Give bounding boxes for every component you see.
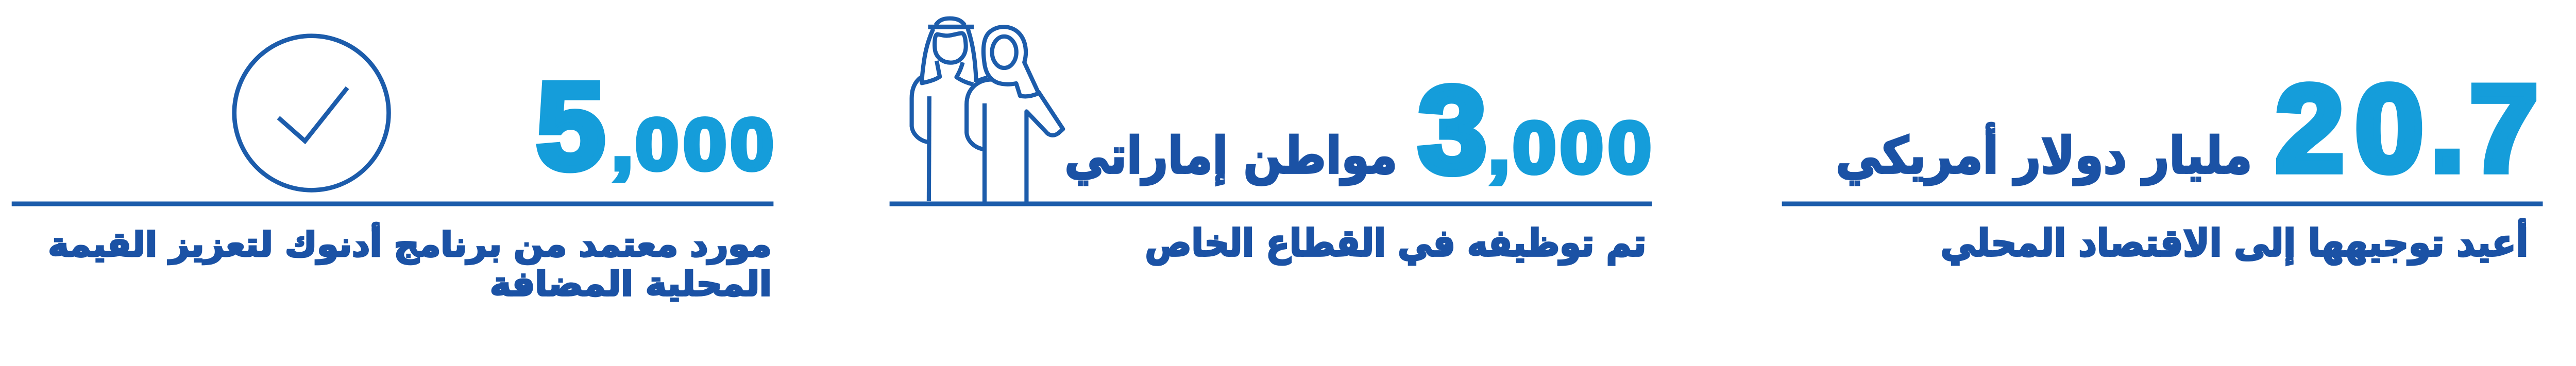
description: employed in private sector: تم توظيفه في القطاع الخاص — [1145, 222, 1646, 265]
description: certified suppliers line 1: مورد معتمد من برنامج أدنوك لتعزيز القيمة — [48, 223, 772, 265]
big number: 20.7: 20.7 — [2276, 61, 2538, 197]
panel: 5,000 certified suppliers — [12, 36, 773, 304]
divider line — [1782, 201, 2543, 206]
panel: 20.7 billion USD — [1782, 61, 2543, 265]
description: certified suppliers line 2: المحلية المضافة — [490, 265, 772, 304]
big number: 5,000: ,000 — [612, 103, 773, 185]
heading: Emirati citizens: مواطن إماراتي — [1064, 127, 1397, 185]
divider line — [12, 201, 773, 206]
big number: 3,000: ,000 — [1488, 107, 1651, 188]
icon: check mark in circle — [234, 36, 388, 190]
big number: 5,000: 5 — [536, 58, 605, 195]
description: redirected to local economy: أعيد توجيهها إلى الاقتصاد المحلي — [1941, 219, 2528, 265]
big number: 3,000: 3 — [1418, 62, 1486, 198]
heading: billion US dollars: مليار دولار أمريكي — [1836, 123, 2252, 186]
panel: 3,000 Emirati citizens — [890, 19, 1652, 265]
divider line — [890, 201, 1652, 206]
big number: 3,000 — [1418, 62, 1651, 198]
big number: 5,000 — [536, 58, 773, 195]
icon: Emirati man and woman — [912, 19, 1063, 202]
